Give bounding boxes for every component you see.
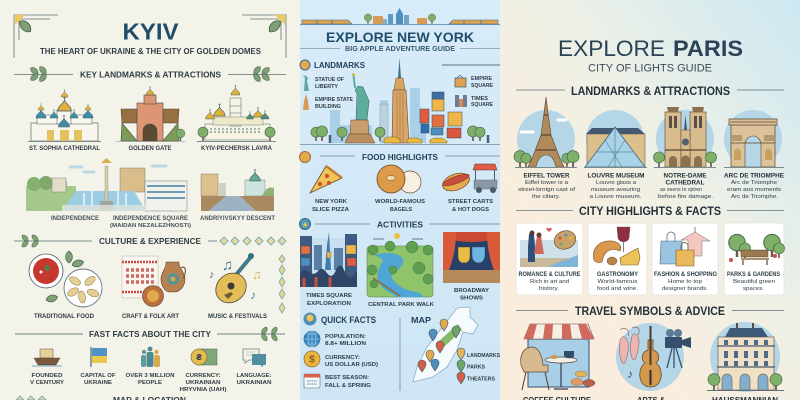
card: gastronomy: GASTRONOMY	[597, 272, 638, 278]
image: Times Square	[300, 232, 357, 287]
landmark list left	[303, 75, 354, 110]
card: fashion and shopping: designer brands.	[662, 286, 709, 292]
heading: landmarks: LANDMARKS	[314, 61, 366, 70]
text: Arc de Triomphe: ARC DE TRIOMPHE	[724, 172, 784, 180]
landmark list left: LIBERTY	[315, 84, 339, 90]
card: romance and culture: history.	[539, 286, 560, 292]
heading: key landmarks: KEY LANDMARKS & ATTRACTIONS	[80, 70, 221, 80]
label	[454, 288, 489, 302]
text: Louvre: Louvre glass a	[596, 180, 637, 186]
map legend: LANDMARKS	[467, 353, 500, 359]
fact: population: 8.8+ MILLION	[325, 341, 366, 347]
heading: landmarks	[300, 60, 500, 70]
card: romance and culture: Rich in art and	[530, 279, 569, 285]
text: Notre-Dame: CATHEDRAL	[666, 180, 705, 186]
fact: population	[304, 331, 366, 347]
label: SLICE PIZZA	[312, 207, 350, 213]
text: Arc de Triomphe	[724, 172, 784, 200]
fact: currency: US DOLLAR (USD)	[325, 362, 378, 368]
title: PARIS	[673, 36, 743, 61]
fact: currency	[180, 349, 227, 393]
landmark list left: BUILDING	[315, 104, 341, 110]
fact: capital: CAPITAL OF	[80, 373, 116, 379]
landmark list right	[455, 75, 494, 108]
text: Notre-Dame	[658, 172, 714, 200]
landmark list left: STATUE OF	[315, 77, 344, 83]
text: Arc de Triomphe: eram aos moments	[727, 187, 781, 193]
heading: key landmarks	[14, 65, 286, 83]
card: romance and culture	[516, 223, 583, 295]
fact: population	[126, 346, 174, 386]
map: MAP	[411, 315, 431, 325]
heading: food highlights	[300, 152, 500, 162]
heading: fast facts	[15, 326, 285, 342]
text: Notre-Dame: as seens to spiren	[660, 187, 702, 193]
label	[306, 293, 352, 307]
quick facts	[304, 312, 378, 389]
panel: Kyiv	[0, 0, 300, 400]
fact: currency: HRYVNIA (UAH)	[180, 387, 227, 393]
card: fashion and shopping: FASHION & SHOPPING	[654, 272, 717, 278]
text: Louvre	[588, 172, 644, 200]
icon: Haussmannian building	[707, 322, 784, 392]
label	[312, 199, 350, 213]
label: & HOT DOGS	[452, 207, 489, 213]
title: EXPLORE	[558, 36, 665, 61]
map	[411, 307, 500, 384]
panel: New York	[300, 0, 500, 400]
icon: arts	[616, 323, 691, 391]
label: BAGELS	[390, 207, 412, 213]
fact: best season	[304, 374, 371, 389]
icon: music lute: ♫	[252, 267, 262, 282]
landmark list right: SQUARE	[471, 102, 494, 108]
label: ST. SOPHIA CATHEDRAL	[29, 146, 100, 152]
labels: independence	[51, 216, 191, 229]
icon: Louvre	[584, 110, 647, 168]
image: Broadway	[443, 232, 500, 283]
card: parks and gardens: PARKS & GARDENS	[727, 272, 780, 278]
text: Notre-Dame: NOTRE-DAME	[664, 172, 706, 180]
heading: activities	[300, 218, 500, 230]
labels: independence: (MAIDAN NEZALEZHNOSTI)	[110, 223, 191, 229]
fact: capital	[80, 347, 116, 386]
text: Arc de Triomphe: Arc de Triomphe.	[731, 194, 779, 200]
fact: currency: UKRAINIAN	[186, 380, 220, 386]
label: KYIV-PECHERSK LAVRA	[201, 146, 273, 152]
map legend	[457, 348, 500, 384]
card: gastronomy	[588, 223, 647, 295]
title: KYIV	[122, 18, 179, 44]
label: CENTRAL PARK WALK	[368, 302, 435, 308]
heading: landmarks: LANDMARKS & ATTRACTIONS	[571, 84, 730, 98]
heading: culture	[14, 233, 286, 249]
quick facts: QUICK FACTS	[321, 315, 376, 325]
text: Arc de Triomphe: Arc de Triomphe	[731, 180, 777, 186]
text: Eiffel Tower: the citiary.	[532, 194, 561, 200]
label	[448, 199, 493, 213]
label: NEW YORK	[315, 199, 348, 205]
title: EXPLORE NEW YORK	[326, 29, 474, 45]
icon: Eiffel Tower	[514, 97, 579, 168]
corner ornaments	[14, 15, 286, 58]
icon: Notre-Dame	[653, 107, 717, 168]
map legend: THEATERS	[467, 376, 495, 382]
icon: coffee culture	[521, 324, 595, 390]
fact: capital: UKRAINE	[84, 380, 112, 386]
icon: music lute: ♪	[250, 288, 256, 302]
landmark list right: SQUARE	[471, 83, 494, 89]
card: parks and gardens: Beautiful green	[733, 279, 775, 285]
heading: activities: ★	[302, 221, 309, 229]
map legend: PARKS	[467, 364, 485, 370]
heading: food highlights: FOOD HIGHLIGHTS	[362, 153, 439, 162]
icon: hot dog and cart	[440, 164, 497, 194]
divider	[399, 318, 401, 391]
top skyline	[300, 8, 500, 24]
text: Louvre: LOUVRE MUSEUM	[588, 172, 644, 180]
icon: Andriyivskyy Descent	[201, 169, 274, 211]
label: TIMES SQUARE	[306, 293, 352, 299]
label: EXPLORATION	[307, 301, 351, 307]
fact: population: OVER 3 MILLION	[126, 373, 174, 379]
icon: arts: ♪	[627, 367, 633, 381]
card: gastronomy: World-famous	[598, 279, 638, 285]
subtitle: BIG APPLE ADVENTURE GUIDE	[345, 46, 455, 53]
title	[558, 36, 743, 61]
icon: St Sophia Cathedral	[28, 89, 101, 142]
subtitle: CITY OF LIGHTS GUIDE	[588, 62, 712, 74]
fact: best season: BEST SEASON:	[325, 375, 369, 381]
fact: language	[236, 349, 272, 386]
label: TRADITIONAL FOOD	[34, 314, 95, 320]
label: SHOWS	[460, 296, 483, 302]
text: Eiffel Tower	[518, 172, 576, 200]
card: gastronomy: food and wine.	[597, 286, 639, 292]
fact: population: POPULATION:	[325, 334, 366, 340]
fact: currency: CURRENCY:	[186, 373, 221, 379]
icon: music lute: ♫	[222, 257, 233, 274]
text: Eiffel Tower: EIFFEL TOWER	[524, 172, 570, 180]
text: Louvre: a Louvre museum.	[590, 194, 642, 200]
label: WORLD-FAMOUS	[375, 199, 425, 205]
heading: culture: CULTURE & EXPERIENCE	[99, 236, 201, 246]
icon: craft and folk art	[122, 256, 185, 306]
fact: currency	[304, 351, 378, 368]
labels: independence: INDEPENDENCE SQUARE	[113, 216, 188, 222]
bottom folk pattern	[16, 396, 46, 400]
icon: traditional food	[29, 251, 102, 307]
card: fashion and shopping: Home to top	[668, 279, 702, 285]
fact: best season: FALL & SPRING	[325, 383, 371, 389]
fact: founded: FOUNDED	[32, 373, 62, 379]
label: ANDRIYIVSKYY DESCENT	[200, 216, 275, 222]
icon: Arc de Triomphe	[724, 110, 784, 168]
label: CRAFT & FOLK ART	[122, 314, 179, 320]
label: MUSIC & FESTIVALS	[208, 314, 267, 320]
icon: music lute: ♪	[209, 269, 214, 281]
decorative pattern strip	[279, 255, 285, 313]
card: romance and culture: ROMANCE & CULTURE	[518, 272, 580, 278]
icon: Golden Gate	[116, 86, 185, 142]
icon: Kyiv-Pechersk Lavra	[197, 85, 276, 142]
fact: language: LANGUAGE:	[236, 373, 272, 379]
illustration: NYC skyline	[300, 58, 500, 144]
landmark list right: EMPIRE	[471, 76, 493, 82]
icon: Independence Square scene	[26, 158, 187, 211]
panel: Paris	[500, 0, 800, 400]
label: BROADWAY	[454, 288, 489, 294]
text: Eiffel Tower: Eiffel tower is a	[525, 180, 569, 186]
card: fashion and shopping	[652, 223, 718, 295]
labels: independence: INDEPENDENCE	[51, 216, 99, 222]
fact: founded	[30, 349, 64, 386]
heading: fast facts: FAST FACTS ABOUT THE CITY	[89, 329, 211, 339]
text: Eiffel Tower: street-broign cast of	[518, 187, 576, 193]
heading: activities: ACTIVITIES	[377, 220, 424, 230]
fact: currency: CURRENCY:	[325, 355, 360, 361]
subtitle: THE HEART OF UKRAINE & THE CITY OF GOLDEN DOMES	[40, 47, 261, 56]
icon: pizza	[310, 166, 342, 193]
fact: language: UKRAINIAN	[236, 380, 272, 386]
label	[375, 199, 425, 213]
fact: founded: V CENTURY	[30, 380, 64, 386]
card: parks and gardens: spaces.	[743, 286, 765, 292]
label: STREET CARTS	[448, 199, 493, 205]
fact: currency: ₴	[196, 353, 202, 362]
heading: travel symbols: TRAVEL SYMBOLS & ADVICE	[575, 304, 725, 318]
landmark list right: TIMES	[471, 96, 489, 102]
heading: city highlights: CITY HIGHLIGHTS & FACTS	[579, 206, 721, 218]
fact: currency: $	[309, 354, 315, 366]
text: Notre-Dame: before fire damage.	[658, 194, 714, 200]
icon: bagels	[377, 165, 421, 193]
fact: population: PEOPLE	[138, 380, 162, 386]
text: Louvre: museum aveuring	[591, 187, 640, 193]
landmark list left: EMPIRE STATE	[315, 97, 354, 103]
card: parks and gardens	[724, 223, 785, 295]
icon: music lute	[209, 253, 262, 309]
label: GOLDEN GATE	[128, 146, 172, 152]
image: Central Park	[367, 233, 433, 297]
